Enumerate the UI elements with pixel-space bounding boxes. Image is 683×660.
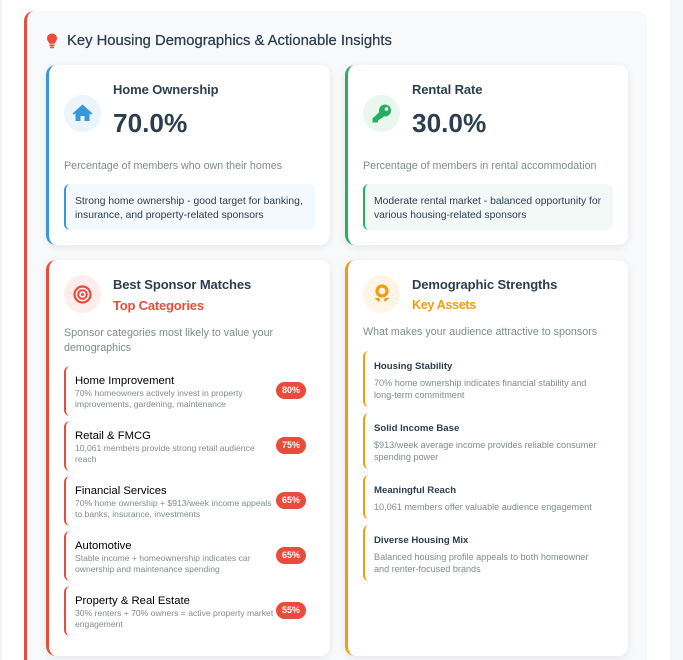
insight note: insurance, and property-related sponsors bbox=[75, 210, 264, 221]
strength: diverse housing mix: and renter-focused brands bbox=[374, 564, 481, 574]
icon: key bbox=[363, 95, 400, 132]
badge: 55% bbox=[282, 605, 300, 615]
sponsor item: automotive bbox=[64, 531, 309, 581]
subtitle: Key Assets bbox=[412, 298, 476, 312]
insight note: Moderate rental market - balanced opportunity for bbox=[374, 196, 601, 207]
icon: house bbox=[64, 95, 101, 132]
sponsor item: retail and FMCG: 10,061 members provide strong retail audience bbox=[75, 443, 255, 453]
strength: meaningful reach bbox=[363, 475, 608, 519]
sponsor item: home improvement: Home Improvement bbox=[75, 375, 174, 387]
sponsor item: home improvement: improvements, gardening, maintenance bbox=[75, 399, 226, 409]
badge bbox=[276, 437, 306, 454]
badge bbox=[276, 547, 306, 564]
badge bbox=[276, 602, 306, 619]
panel: home ownership card bbox=[46, 65, 330, 245]
title: Rental Rate bbox=[412, 82, 482, 97]
badge: 80% bbox=[282, 385, 300, 395]
strength: solid income base: $913/week average income provides reliable consumer bbox=[374, 440, 596, 450]
strength: housing stability: long-term commitment bbox=[374, 390, 464, 400]
description: demographics bbox=[64, 342, 131, 354]
icon: target bbox=[64, 275, 101, 313]
sponsor item: property and real estate: engagement bbox=[75, 619, 123, 629]
insight note bbox=[64, 184, 315, 230]
strength: meaningful reach: 10,061 members offer valuable audience engagement bbox=[374, 502, 592, 512]
stat value: 70.0% bbox=[113, 108, 187, 138]
sponsor item: home improvement bbox=[64, 366, 309, 416]
heading: Key Housing Demographics & Actionable Insights bbox=[67, 33, 392, 49]
description: What makes your audience attractive to sponsors bbox=[363, 326, 597, 338]
sponsor item: retail and FMCG: reach bbox=[75, 454, 96, 464]
sponsor item: automotive: Automotive bbox=[75, 540, 132, 552]
badge bbox=[276, 492, 306, 509]
strength: diverse housing mix bbox=[363, 525, 608, 581]
insight note bbox=[363, 184, 613, 230]
badge: 75% bbox=[282, 440, 300, 450]
sponsor item: home improvement: 70% homeowners actively invest in property bbox=[75, 388, 243, 398]
sponsor item: financial services: to banks, insurance, investments bbox=[75, 509, 200, 519]
strength: solid income base: Solid Income Base bbox=[374, 423, 459, 434]
insight note: various housing-related sponsors bbox=[374, 210, 526, 221]
insight note: Strong home ownership - good target for banking, bbox=[75, 196, 303, 207]
sponsor item: property and real estate: Property & Real Estate bbox=[75, 595, 190, 607]
sponsor item: automotive: ownership and maintenance spending bbox=[75, 564, 220, 574]
strength: meaningful reach: Meaningful Reach bbox=[374, 485, 456, 496]
sponsor item: property and real estate: 30% renters + 70% owners = active property market bbox=[75, 608, 273, 618]
sponsor item: financial services bbox=[64, 476, 309, 526]
sponsor item: retail and FMCG: Retail & FMCG bbox=[75, 430, 151, 442]
description: Percentage of members who own their homes bbox=[64, 160, 282, 172]
description: Sponsor categories most likely to value your bbox=[64, 327, 273, 339]
panel: best sponsor matches card bbox=[46, 260, 330, 656]
strength: housing stability: Housing Stability bbox=[374, 361, 452, 372]
strength: solid income base: spending power bbox=[374, 452, 438, 462]
title: Demographic Strengths bbox=[412, 277, 557, 292]
panel: demographic strengths card bbox=[345, 260, 628, 656]
title: Home Ownership bbox=[113, 82, 219, 97]
badge bbox=[276, 382, 306, 399]
description: Percentage of members in rental accommodation bbox=[363, 160, 596, 172]
subtitle: Top Categories bbox=[113, 298, 204, 313]
panel: rental rate card bbox=[345, 65, 628, 245]
strength: diverse housing mix: Balanced housing profile appeals to both homeowner bbox=[374, 552, 588, 562]
badge: 65% bbox=[282, 550, 300, 560]
icon: lightbulb bbox=[47, 34, 57, 48]
sponsor item: financial services: 70% home ownership + $913/week income appeals bbox=[75, 498, 272, 508]
sponsor item: property and real estate bbox=[64, 586, 309, 636]
title: Best Sponsor Matches bbox=[113, 277, 251, 292]
strength: solid income base bbox=[363, 413, 608, 469]
strength: diverse housing mix: Diverse Housing Mix bbox=[374, 535, 468, 546]
strength: housing stability bbox=[363, 351, 608, 407]
description bbox=[64, 327, 273, 354]
strength: housing stability: 70% home ownership indicates financial stability and bbox=[374, 378, 586, 388]
sponsor item: automotive: Stable income + homeownership indicates car bbox=[75, 553, 251, 563]
badge: 65% bbox=[282, 495, 300, 505]
stat value: 30.0% bbox=[412, 108, 486, 138]
icon: award bbox=[363, 275, 400, 313]
sponsor item: financial services: Financial Services bbox=[75, 485, 167, 497]
sponsor item: retail and FMCG bbox=[64, 421, 309, 471]
